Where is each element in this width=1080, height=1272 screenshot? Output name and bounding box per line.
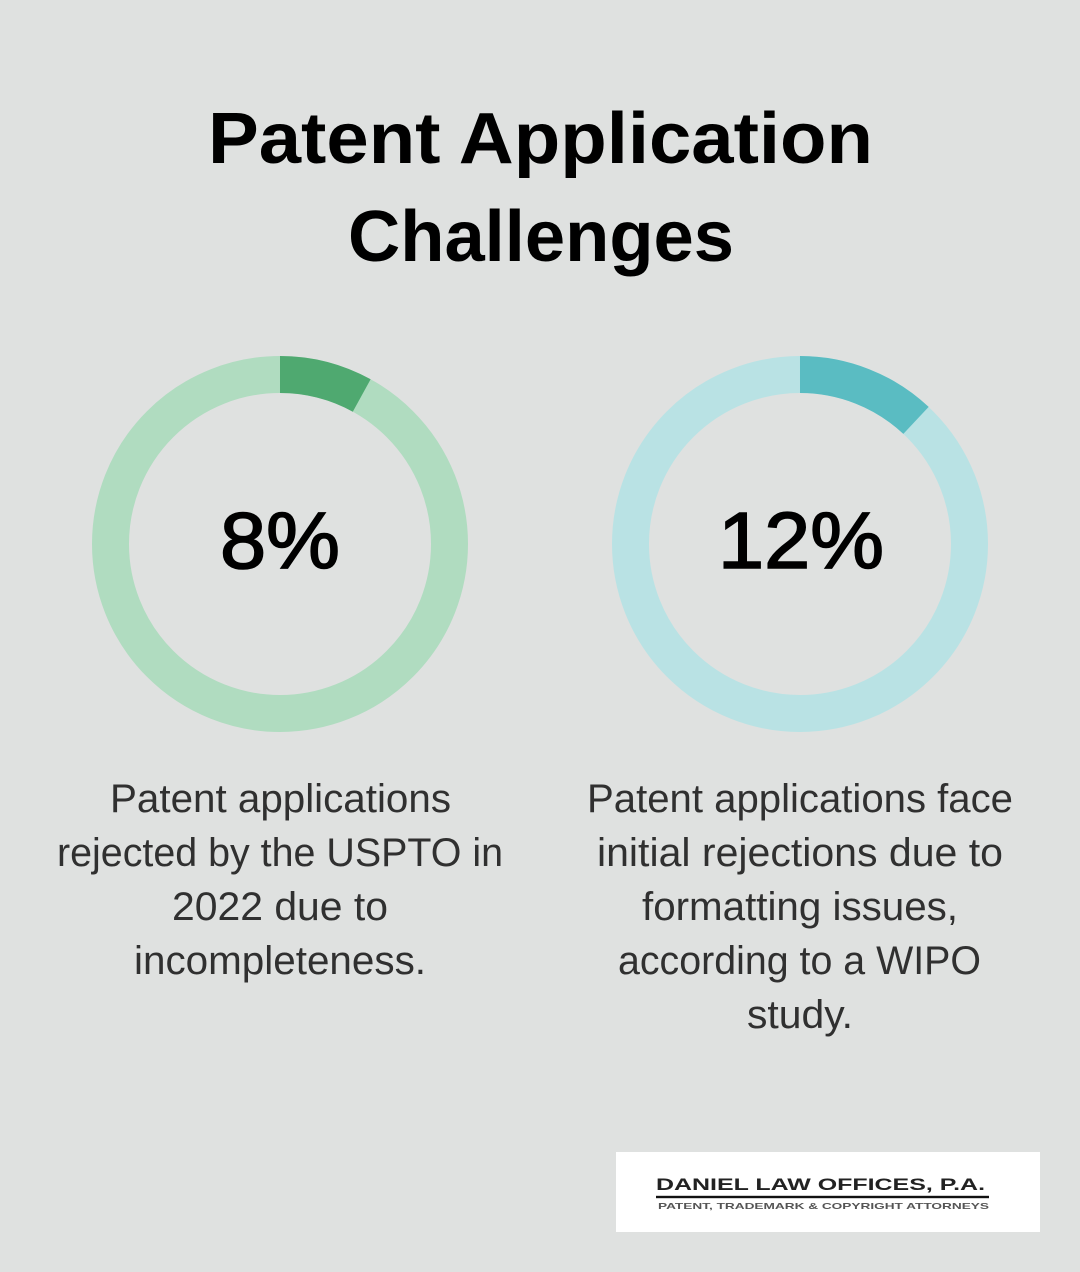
text block: 12% description: formatting issues,	[642, 885, 958, 929]
title	[208, 99, 873, 277]
text block: 8% description	[57, 777, 503, 983]
title: Challenges	[348, 197, 734, 277]
text block: 8% description: incompleteness.	[134, 939, 426, 983]
text block: 12% description: Patent applications face	[587, 777, 1013, 821]
text block: 8% description: rejected by the USPTO in	[57, 831, 503, 875]
donut chart: 8%	[110, 374, 450, 714]
text block: 12% description: initial rejections due to	[597, 831, 1003, 875]
title: Patent Application	[208, 99, 873, 179]
logo: Daniel Law Offices: DANIEL LAW OFFICES, P.A.	[656, 1176, 985, 1194]
donut chart: 8%: 8%	[220, 496, 340, 585]
text block: 12% description: according to a WIPO	[618, 939, 981, 983]
text block: 8% description: 2022 due to	[172, 885, 388, 929]
text block: 8% description: Patent applications	[110, 777, 451, 821]
text block: 12% description: study.	[747, 993, 853, 1037]
logo: Daniel Law Offices	[616, 1152, 1040, 1232]
donut chart: 12%: 12%	[718, 496, 884, 585]
logo: Daniel Law Offices: PATENT, TRADEMARK & COPYRIGHT ATTORNEYS	[658, 1201, 990, 1211]
donut chart: 12%	[630, 374, 970, 714]
text block: 12% description	[587, 777, 1013, 1037]
